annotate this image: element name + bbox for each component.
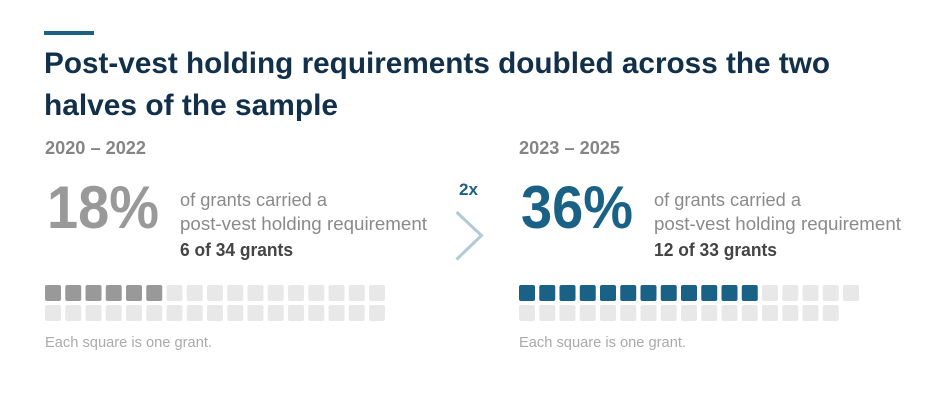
waffle note: Each square is one grant.: [45, 335, 212, 351]
description: post-vest holding requirement: [180, 214, 427, 234]
description: [654, 190, 901, 234]
period label: 2020 – 2022: [45, 138, 146, 158]
waffle chart: 12 of 33: [519, 285, 859, 321]
waffle note: Each square is one grant.: [519, 335, 686, 351]
title: Post-vest holding requirements doubled across the two: [44, 47, 830, 80]
title: [44, 47, 830, 122]
panel: 2020 to 2022: [45, 138, 427, 351]
title: halves of the sample: [44, 89, 338, 122]
multiplier label: 2x: [459, 180, 479, 199]
description: of grants carried a: [654, 190, 802, 210]
description: post-vest holding requirement: [654, 214, 901, 234]
description: of grants carried a: [180, 190, 328, 210]
arrow: chevron: [456, 212, 482, 260]
big number: 18%: 18%: [47, 174, 159, 241]
waffle chart: 6 of 34: [45, 285, 385, 321]
period label: 2023 – 2025: [519, 138, 620, 158]
description: [180, 190, 427, 234]
grant count: 12 of 33 grants: [654, 240, 777, 260]
grant count: 6 of 34 grants: [180, 240, 293, 260]
accent bar: [44, 31, 94, 35]
panel: 2023 to 2025: [519, 138, 901, 351]
big number: 36%: 36%: [521, 174, 633, 241]
